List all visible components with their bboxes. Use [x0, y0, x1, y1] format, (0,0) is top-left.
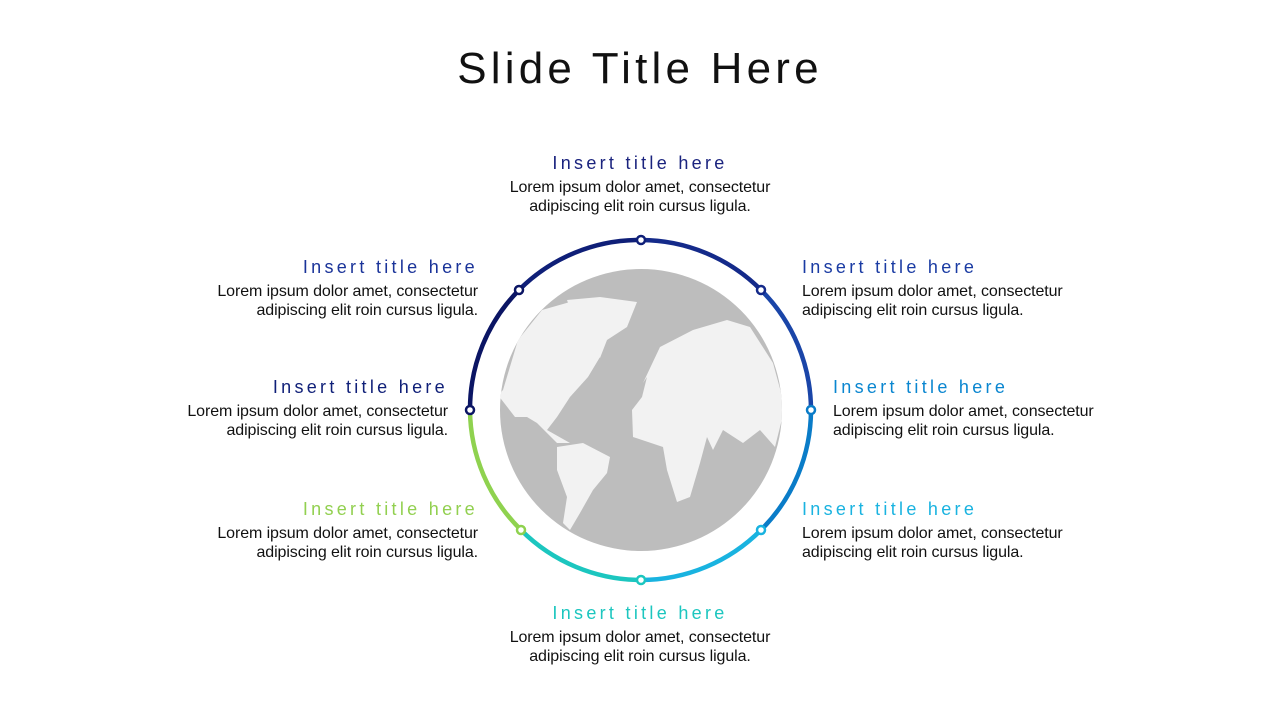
text block: bottom-left: Insert title here [303, 499, 478, 519]
text block: bottom-right [802, 499, 1063, 561]
text block: top: Lorem ipsum dolor amet, consectetur [510, 179, 770, 196]
text block: top-right [802, 257, 1063, 319]
text block: bottom-right: adipiscing elit roin cursus ligula. [802, 544, 1024, 561]
text block: top-right: Insert title here [802, 257, 977, 277]
text block: bottom-right: Insert title here [802, 499, 977, 519]
text block: left: adipiscing elit roin cursus ligula. [226, 422, 448, 439]
text block: left [187, 377, 448, 439]
text block: right: adipiscing elit roin cursus ligula. [833, 422, 1055, 439]
text block: bottom: adipiscing elit roin cursus ligula. [529, 648, 751, 665]
text block: bottom [510, 603, 770, 665]
text block: top-left: Insert title here [303, 257, 478, 277]
ring dots [466, 236, 815, 584]
text block: bottom-right: Lorem ipsum dolor amet, consectetur [802, 525, 1063, 542]
title: Slide Title Here [457, 44, 823, 93]
text block: left: Insert title here [273, 377, 448, 397]
text block: top-left: Lorem ipsum dolor amet, consectetur [217, 283, 478, 300]
text block: top: Insert title here [552, 153, 728, 173]
text block: top-left: adipiscing elit roin cursus ligula. [256, 302, 478, 319]
text block: bottom-left: adipiscing elit roin cursus ligula. [256, 544, 478, 561]
ring [470, 240, 811, 580]
globe [498, 269, 785, 551]
text block: bottom: Insert title here [552, 603, 728, 623]
text block: top-left [217, 257, 478, 319]
text block: bottom-left: Lorem ipsum dolor amet, consectetur [217, 525, 478, 542]
text block: top [510, 153, 770, 215]
text block: left: Lorem ipsum dolor amet, consectetur [187, 403, 448, 420]
text block: right: Lorem ipsum dolor amet, consectetur [833, 403, 1094, 420]
text block: bottom: Lorem ipsum dolor amet, consectetur [510, 629, 770, 646]
text block: right [833, 377, 1094, 439]
text block: right: Insert title here [833, 377, 1008, 397]
text block: bottom-left [217, 499, 478, 561]
text block: top: adipiscing elit roin cursus ligula. [529, 198, 751, 215]
text block: top-right: adipiscing elit roin cursus ligula. [802, 302, 1024, 319]
ring and globe graphic [464, 234, 816, 586]
text block: top-right: Lorem ipsum dolor amet, consectetur [802, 283, 1063, 300]
